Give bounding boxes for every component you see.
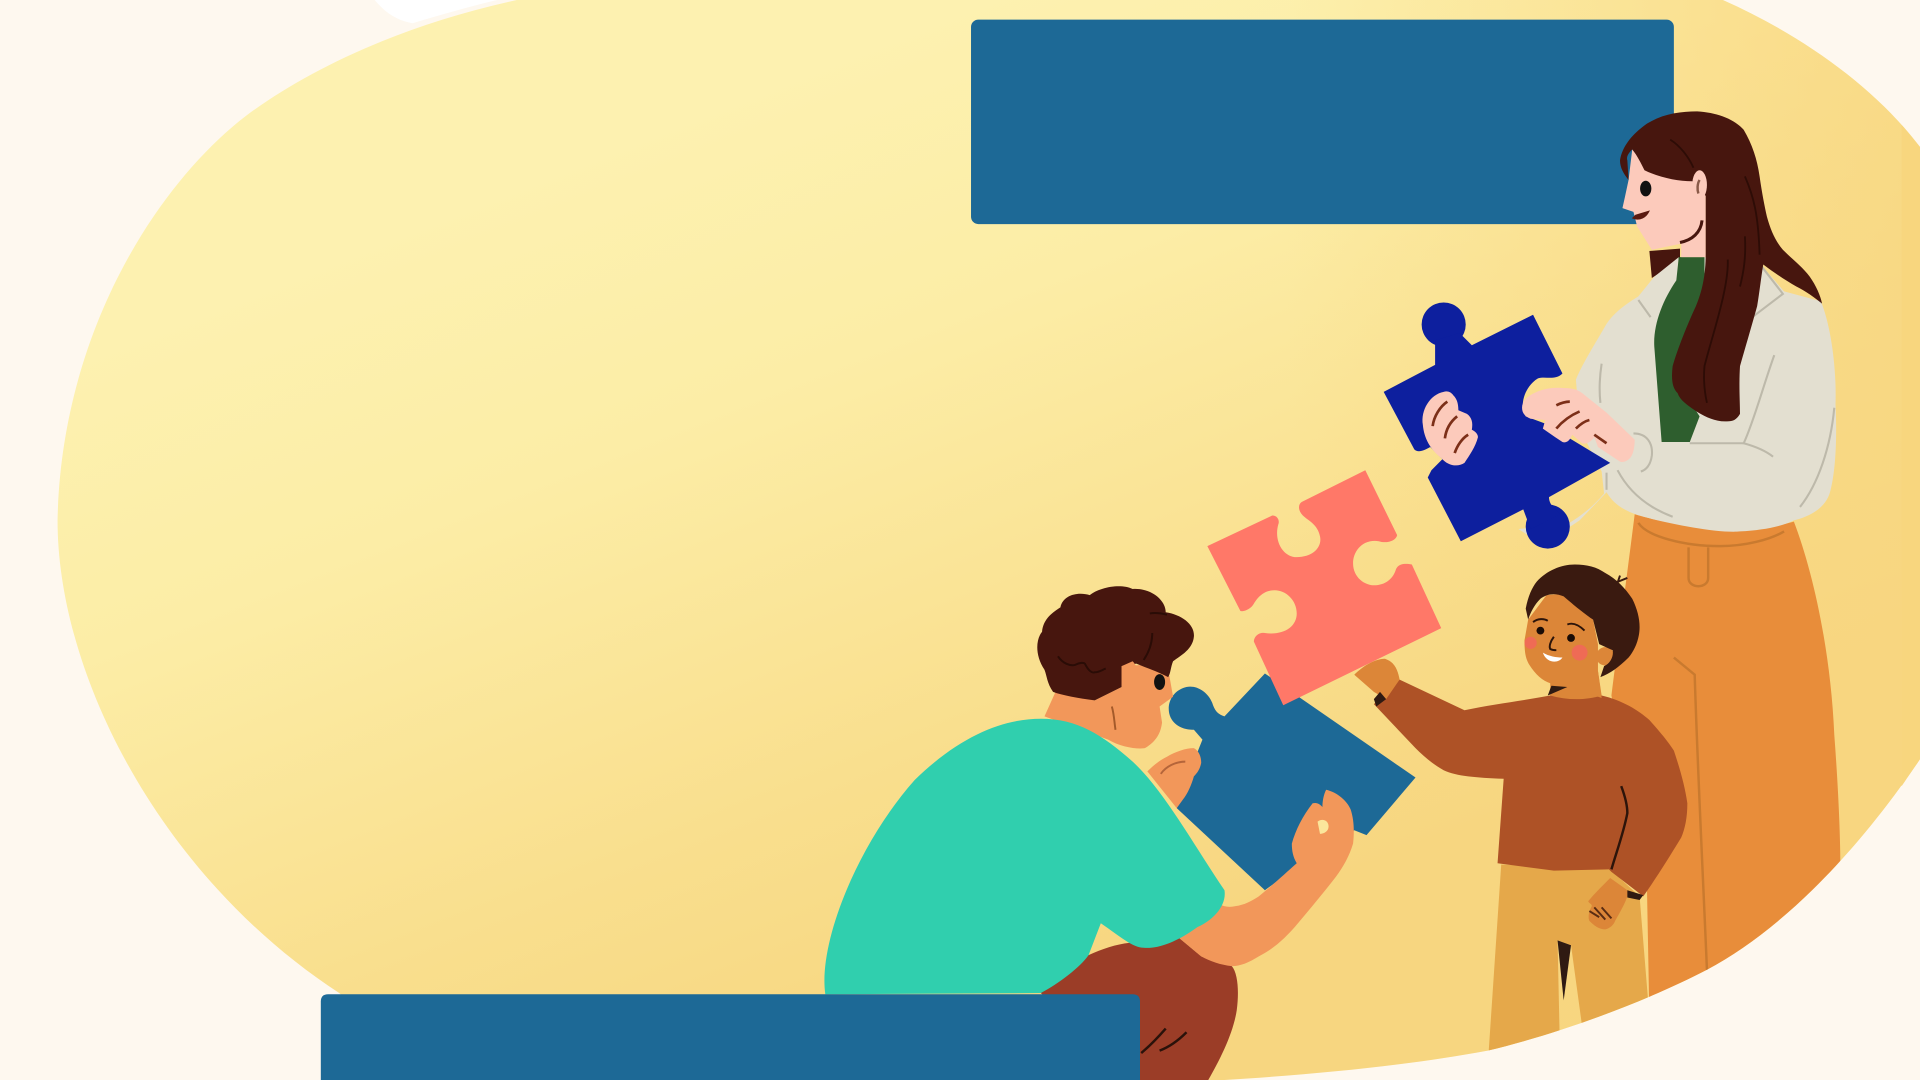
boy eyes	[1536, 627, 1575, 642]
woman turtleneck	[1654, 257, 1704, 442]
woman jacket creases	[1600, 267, 1834, 517]
boy lower hand	[1588, 878, 1627, 929]
boy face	[1524, 594, 1602, 698]
boy neck	[1550, 671, 1602, 700]
navy body	[1384, 315, 1610, 541]
bottom blue panel	[321, 994, 1140, 1080]
right darker strip of blob	[1902, 125, 1920, 786]
puzzle piece: navy	[1384, 302, 1610, 549]
boy cheeks	[1524, 637, 1588, 661]
boy trouser gap	[1558, 940, 1571, 1000]
woman hair strands	[1670, 140, 1760, 403]
figure: boy	[1354, 564, 1687, 1065]
woman right hand	[1422, 391, 1478, 465]
puzzle piece: coral	[1207, 470, 1441, 705]
woman trousers	[1611, 514, 1840, 1016]
woman ear inner	[1698, 180, 1700, 193]
man neck line	[1112, 707, 1116, 730]
figure: man	[824, 586, 1354, 1080]
man hair curl	[1058, 613, 1167, 673]
man eye	[1154, 674, 1165, 690]
boy sweater crease	[1611, 786, 1627, 869]
top white highlight	[375, 0, 497, 23]
man thumb gap	[1318, 820, 1329, 834]
woman ear	[1692, 170, 1707, 195]
boy ear	[1598, 647, 1613, 666]
man ear	[1122, 661, 1138, 693]
boy hair	[1526, 564, 1640, 677]
man hair	[1037, 586, 1194, 700]
navy top knob	[1422, 302, 1466, 347]
puzzle piece: teal blue	[1169, 673, 1416, 890]
boy hand lines	[1589, 907, 1611, 920]
boy neck shadow	[1548, 686, 1567, 696]
finger lines	[1433, 402, 1607, 453]
woman hair	[1620, 111, 1822, 421]
figure: woman	[1518, 111, 1840, 1016]
boy cuffs	[1374, 692, 1643, 900]
man trousers	[1041, 938, 1238, 1080]
man shirt	[824, 719, 1225, 994]
woman face	[1622, 149, 1706, 257]
woman trouser seams	[1638, 523, 1784, 970]
navy bottom knob	[1526, 504, 1570, 549]
man near hand	[1147, 748, 1201, 808]
man trouser creases	[1141, 1029, 1187, 1053]
man head and neck	[1044, 665, 1173, 748]
top blue panel	[971, 20, 1674, 224]
woman jaw line	[1680, 220, 1702, 242]
woman eye	[1640, 181, 1651, 196]
man arm and hand	[1179, 790, 1354, 966]
man hand line	[1161, 762, 1185, 774]
woman jacket	[1518, 257, 1836, 545]
boy smile	[1543, 653, 1562, 662]
woman back hair	[1649, 249, 1680, 278]
boy raised hand	[1354, 659, 1400, 699]
boy hair tuft	[1615, 576, 1627, 583]
woman mouth	[1633, 212, 1648, 219]
boy trousers	[1488, 864, 1649, 1065]
boy sweater	[1374, 680, 1687, 896]
woman left hand and wrist	[1522, 388, 1635, 462]
boy brows and nose	[1533, 619, 1584, 650]
